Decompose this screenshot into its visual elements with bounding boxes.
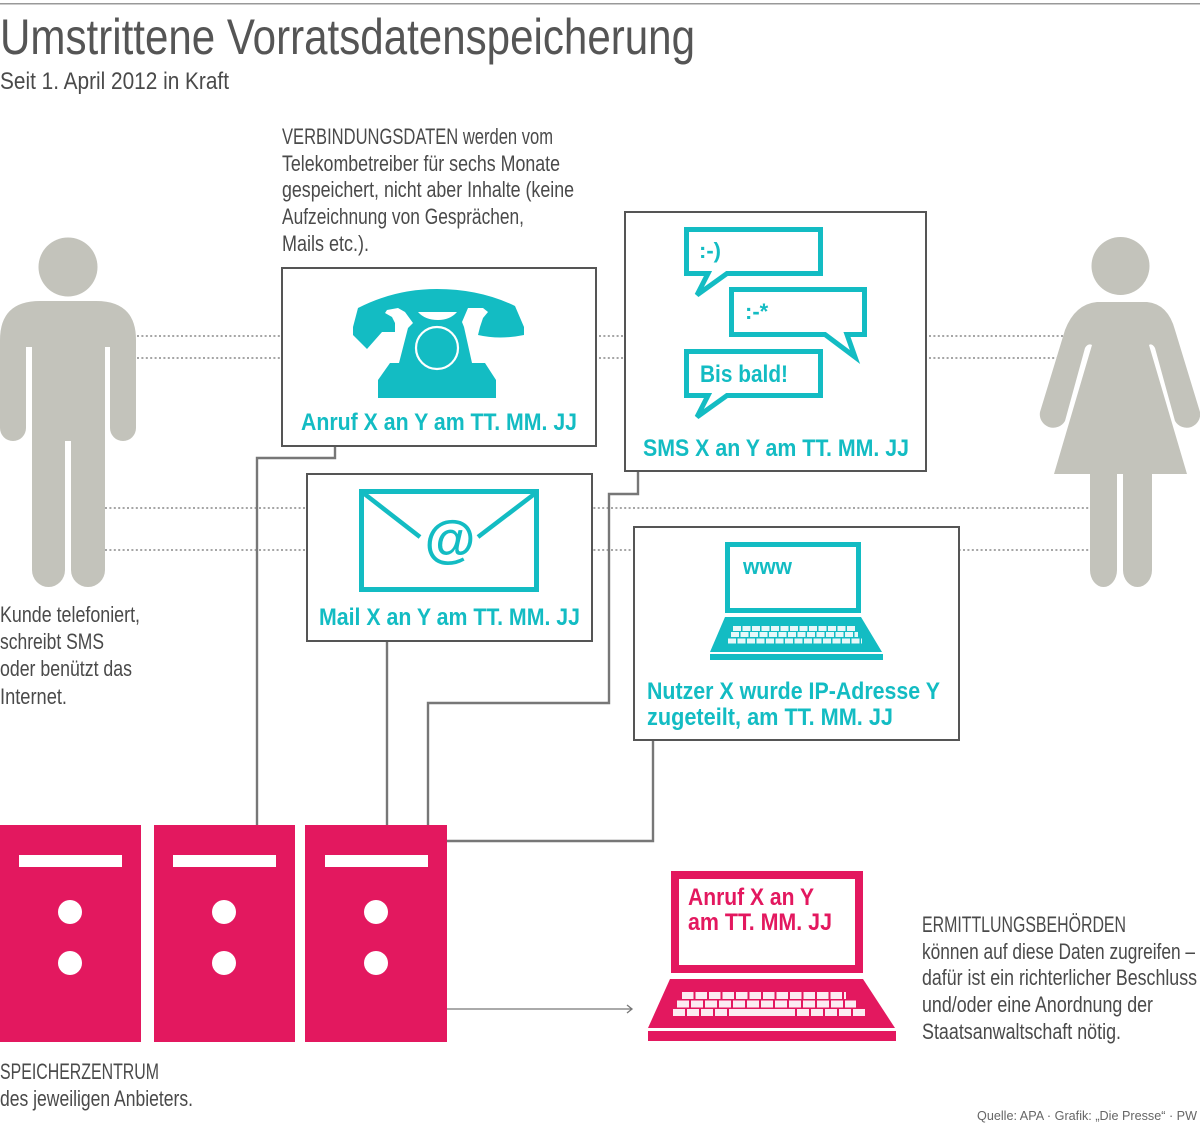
subtitle: Seit 1. April 2012 in Kraft — [0, 68, 229, 95]
text block: Kunde — [0, 602, 140, 709]
text block: Verbindungsdaten: Mails etc.). — [282, 231, 369, 256]
text block: Speicherzentrum — [0, 1059, 193, 1111]
text block: Verbindungsdaten: Aufzeichnung von Gesprächen, — [282, 204, 524, 229]
icon: speech bubbles: :-) — [699, 238, 721, 263]
icon: laptop www — [710, 544, 883, 660]
text block: Ermittlungsbehörden: Staatsanwaltschaft nötig. — [922, 1019, 1121, 1044]
panel: phone call — [282, 268, 596, 446]
text block: Verbindungsdaten — [282, 124, 574, 256]
icon: envelope — [362, 492, 537, 590]
server 1 — [0, 825, 141, 1042]
data centre: servers — [0, 825, 447, 1042]
server 3 — [305, 825, 447, 1042]
icon: authorities laptop — [648, 875, 896, 1041]
icon: woman — [1040, 237, 1200, 587]
icon: speech bubbles — [686, 230, 864, 417]
text block: Verbindungsdaten: Telekombetreiber für sechs Monate — [282, 151, 560, 176]
icon: speech bubbles: :-* — [745, 299, 769, 324]
caption: mail: Mail X an Y am TT. MM. JJ — [319, 604, 580, 631]
connector: SMS to server — [428, 471, 638, 825]
connector: internet to server — [447, 740, 653, 841]
panel: internet — [634, 527, 959, 740]
icon: authorities laptop: am TT. MM. JJ — [688, 909, 832, 936]
text block: Kunde: oder benützt das — [0, 656, 132, 681]
caption: internet: zugeteilt, am TT. MM. JJ — [647, 704, 893, 731]
icon: laptop www: www — [742, 554, 793, 579]
text block: Ermittlungsbehörden — [922, 912, 1197, 1044]
text block: Speicherzentrum: SPEICHERZENTRUM — [0, 1059, 159, 1084]
icon: speech bubbles: Bis bald! — [700, 361, 788, 388]
icon: envelope: @ — [425, 511, 475, 569]
text block: Kunde: Internet. — [0, 684, 67, 709]
text block: Kunde: Kunde telefoniert, — [0, 602, 140, 627]
caption: phone: Anruf X an Y am TT. MM. JJ — [301, 409, 577, 436]
text block: Ermittlungsbehörden: ERMITTLUNGSBEHÖRDEN — [922, 912, 1126, 937]
icon: authorities laptop: Anruf X an Y — [688, 884, 814, 911]
caption: internet: Nutzer X wurde IP-Adresse Y — [647, 678, 940, 705]
text block: Speicherzentrum: des jeweiligen Anbieters. — [0, 1086, 193, 1111]
icon: telephone — [353, 289, 524, 398]
title: Umstrittene Vorratsdatenspeicherung — [0, 9, 695, 65]
panel: SMS — [625, 212, 926, 471]
icon: man — [0, 238, 136, 587]
caption: SMS: SMS X an Y am TT. MM. JJ — [643, 435, 909, 462]
connector: phone to server — [257, 447, 335, 825]
panel: mail — [307, 474, 592, 641]
text block: Kunde: schreibt SMS — [0, 629, 104, 654]
server 2 — [154, 825, 295, 1042]
text block: Verbindungsdaten: gespeichert, nicht aber Inhalte (keine — [282, 177, 574, 202]
text block: Ermittlungsbehörden: und/oder eine Anordnung der — [922, 992, 1153, 1017]
connector: mail to server — [386, 641, 388, 825]
source credit: Quelle: APA · Grafik: „Die Presse“ · PW — [977, 1108, 1198, 1123]
text block: Verbindungsdaten: VERBINDUNGSDATEN werden vom — [282, 124, 553, 149]
caption: internet — [647, 678, 940, 731]
arrow: server to authorities — [447, 1005, 632, 1013]
